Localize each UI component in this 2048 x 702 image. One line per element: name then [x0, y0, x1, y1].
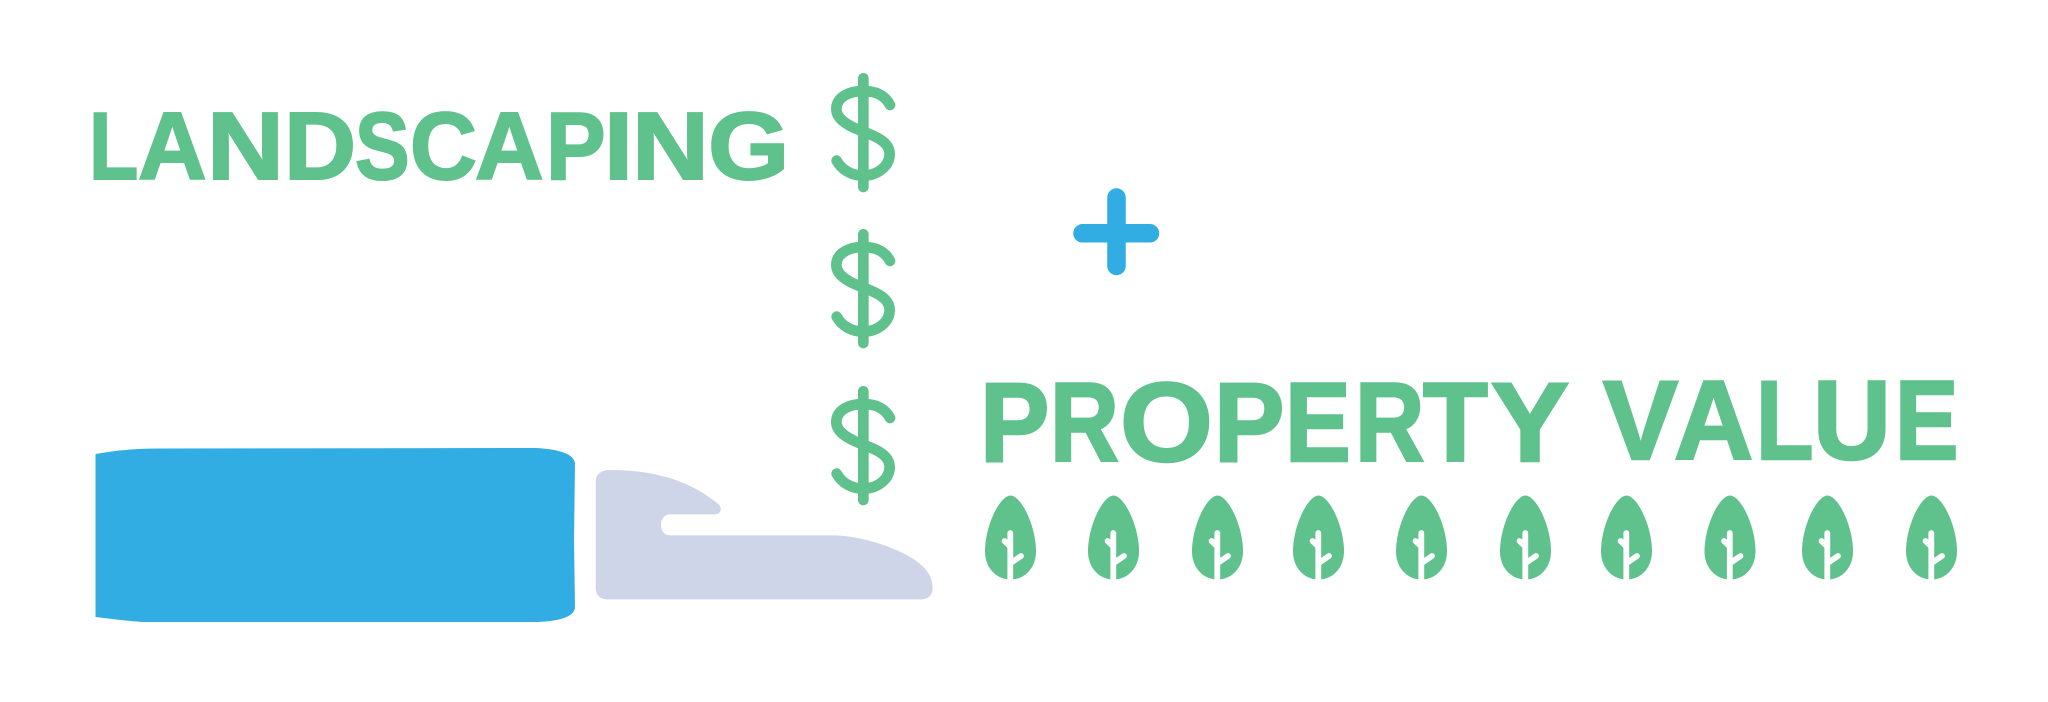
heading: landscaping	[89, 93, 789, 200]
icon: dollar sign 1	[836, 78, 890, 187]
heading: landscaping: D	[284, 93, 356, 200]
heading: landscaping: G	[708, 93, 789, 200]
icon: tree 7	[1601, 496, 1652, 582]
heading: property value: R	[1050, 360, 1119, 485]
heading: property value: L	[1756, 358, 1814, 483]
heading: property value: Y	[1491, 360, 1569, 485]
shape: blue pool block	[96, 448, 575, 622]
icon: dollar sign 2	[836, 234, 890, 343]
heading: landscaping: N	[632, 93, 709, 200]
shape: lavender landscape block	[596, 470, 933, 599]
heading: property value: A	[1674, 358, 1753, 483]
heading: property value: V	[1603, 358, 1678, 483]
icon: tree 2	[1088, 496, 1139, 582]
heading: landscaping: S	[355, 93, 410, 200]
heading: property value	[980, 358, 1959, 485]
heading: property value: E	[1895, 358, 1959, 483]
icon: tree 6	[1500, 496, 1551, 582]
icon: tree 10	[1906, 496, 1957, 582]
heading: property value: U	[1813, 358, 1891, 483]
icon: tree 9	[1802, 496, 1853, 582]
heading: landscaping: A	[138, 93, 207, 200]
heading: property value: T	[1423, 360, 1488, 485]
icon: tree 5	[1396, 496, 1447, 582]
heading: landscaping: L	[89, 93, 139, 200]
icon: tree 4	[1293, 496, 1344, 582]
heading: landscaping: A	[475, 93, 544, 200]
icon: tree 8	[1704, 496, 1756, 582]
heading: property value: R	[1355, 360, 1425, 485]
heading: landscaping: I	[604, 93, 633, 200]
heading: landscaping: P	[546, 93, 605, 200]
heading: landscaping: C	[410, 93, 477, 200]
icon: tree 1	[985, 496, 1036, 582]
icon: dollar sign 3	[836, 391, 890, 500]
heading: property value: E	[1285, 360, 1351, 485]
icon row: ten trees	[985, 496, 1957, 582]
heading: landscaping: N	[207, 93, 284, 200]
heading: property value: O	[1120, 360, 1213, 485]
icon: plus sign	[1082, 198, 1150, 266]
heading: property value: P	[980, 360, 1049, 485]
heading: property value: P	[1214, 360, 1284, 485]
icon: tree 3	[1192, 496, 1243, 582]
